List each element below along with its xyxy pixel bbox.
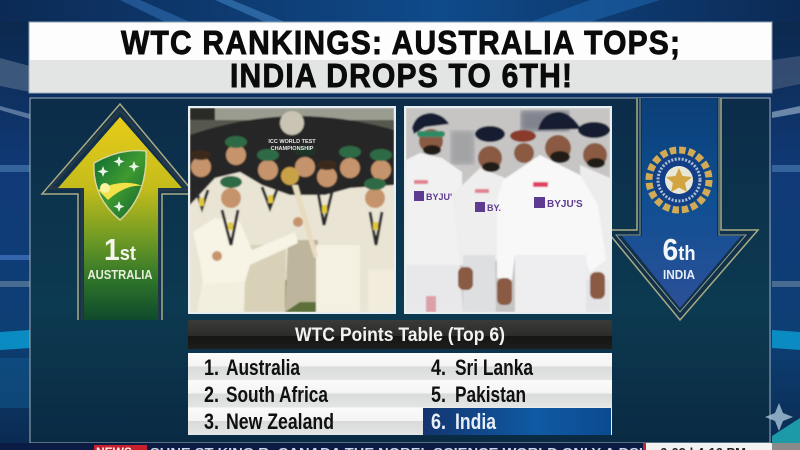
points table: [188, 353, 612, 435]
main panel: [30, 98, 770, 443]
photo: India team: [404, 106, 612, 314]
photo: Australia team with trophy: [188, 106, 396, 314]
sponsor logos: BY.: [487, 203, 501, 213]
row: 5 Pakistan: Pakistan: [455, 382, 526, 407]
title banner: INDIA DROPS TO 6TH!: [230, 57, 572, 94]
photo caption: ICC WORLD TEST: [268, 139, 316, 145]
row: 6 India highlighted: 6.: [431, 409, 446, 434]
country label: Australia: AUSTRALIA: [88, 267, 153, 282]
sponsor logos: [414, 191, 583, 213]
icon: up arrow, Australia 1st: [42, 104, 195, 320]
row: 4 Sri Lanka: [423, 353, 612, 380]
row: 3 New Zealand: [188, 408, 423, 435]
row: 5 Pakistan: [423, 380, 612, 408]
country label: India: INDIA: [663, 267, 696, 282]
row: 3 New Zealand: New Zealand: [226, 409, 334, 434]
sponsor logos: BYJU'S: [547, 199, 583, 210]
sponsor logos: BYJU': [426, 192, 452, 202]
rank label: 6th: 6th: [662, 232, 696, 267]
row: 1 Australia: 1.: [204, 355, 219, 380]
row: 3 New Zealand: 3.: [204, 409, 219, 434]
row: 1 Australia: Australia: [226, 355, 301, 380]
row: 2 South Africa: [188, 380, 423, 408]
table header: [188, 320, 612, 349]
title banner: WTC RANKINGS: AUSTRALIA TOPS;: [121, 24, 680, 61]
icon: BCCI crest: [649, 150, 709, 210]
row: 5 Pakistan: 5.: [431, 382, 446, 407]
title banner: [29, 22, 772, 94]
photo: Australia team with trophy: CHAMPIONSHIP: [271, 146, 314, 152]
row: 2 South Africa: South Africa: [226, 382, 329, 407]
news ticker: [0, 443, 800, 450]
icon: Australia shield: [94, 150, 146, 220]
row: 6 India highlighted: [423, 408, 611, 435]
rank label: 1st: 1st: [104, 232, 136, 267]
table header: WTC Points Table (Top 6): [295, 325, 505, 346]
row: 4 Sri Lanka: 4.: [431, 355, 446, 380]
icon: sparkle watermark: [765, 403, 793, 431]
row: 4 Sri Lanka: Sri Lanka: [455, 355, 534, 380]
row: 2 South Africa: 2.: [204, 382, 219, 407]
row: 6 India highlighted: India: [455, 409, 497, 434]
icon: down arrow, India 6th: [606, 98, 758, 320]
row: 1 Australia: [188, 353, 423, 380]
